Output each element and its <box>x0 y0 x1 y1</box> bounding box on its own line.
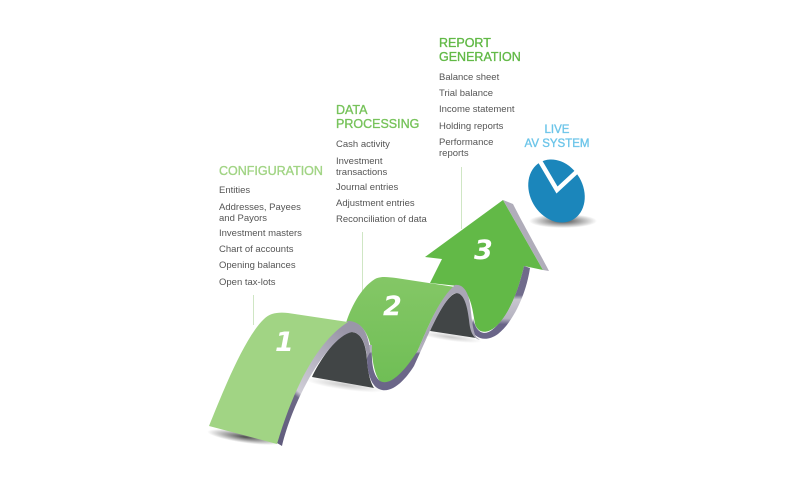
step 2 band <box>346 277 480 385</box>
arrow head and shaft, step 3 <box>425 200 549 339</box>
step numbers: 2 <box>383 291 402 322</box>
list: data processing: Investment <box>336 156 382 167</box>
heading: live av system: LIVE <box>545 124 569 136</box>
list: report generation <box>439 72 515 158</box>
step numbers: 3 <box>474 235 493 266</box>
heading: report generation <box>439 36 521 64</box>
heading: report generation: GENERATION <box>439 50 521 64</box>
ground shadows <box>207 329 482 448</box>
list: configuration: Addresses, Payees <box>219 202 301 213</box>
list: data processing: Reconciliation of data <box>336 214 427 225</box>
heading: live av system <box>524 124 589 150</box>
step 1 band <box>209 313 348 444</box>
list: report generation: reports <box>439 148 469 158</box>
pie chart <box>517 149 597 233</box>
heading: live av system: AV SYSTEM <box>525 138 589 150</box>
heading: data processing <box>336 103 419 131</box>
silver trough edge between steps 1 and 2 <box>367 335 428 390</box>
silver edge of step 1 <box>272 321 370 446</box>
step numbers <box>275 235 493 358</box>
list: report generation: Balance sheet <box>439 72 499 83</box>
connector lines <box>254 167 462 325</box>
heading: data processing: DATA <box>336 103 367 117</box>
list: report generation: Holding reports <box>439 121 503 132</box>
list: report generation: Performance <box>439 137 493 148</box>
list: configuration: Opening balances <box>219 260 296 271</box>
list: data processing: Adjustment entries <box>336 198 415 209</box>
list: configuration: and Payors <box>219 212 267 224</box>
dark underside between steps 1 and 2 <box>312 332 374 388</box>
dark underside between steps 2 and 3 <box>430 293 476 338</box>
list: configuration <box>219 185 302 288</box>
list: data processing: Cash activity <box>336 139 390 150</box>
heading: report generation: REPORT <box>439 36 491 50</box>
list: configuration: Chart of accounts <box>219 244 293 255</box>
list: report generation: Trial balance <box>439 88 493 99</box>
list: data processing: Journal entries <box>336 182 398 193</box>
list: configuration: Open tax-lots <box>219 277 276 288</box>
list: data processing: transactions <box>336 166 387 178</box>
step numbers: 1 <box>275 327 294 358</box>
list: data processing <box>336 139 427 225</box>
heading: configuration: CONFIGURATION <box>219 164 323 178</box>
heading: data processing: PROCESSING <box>336 117 419 131</box>
list: configuration: Investment masters <box>219 228 302 239</box>
list: configuration: Entities <box>219 185 250 196</box>
list: report generation: Income statement <box>439 104 515 115</box>
